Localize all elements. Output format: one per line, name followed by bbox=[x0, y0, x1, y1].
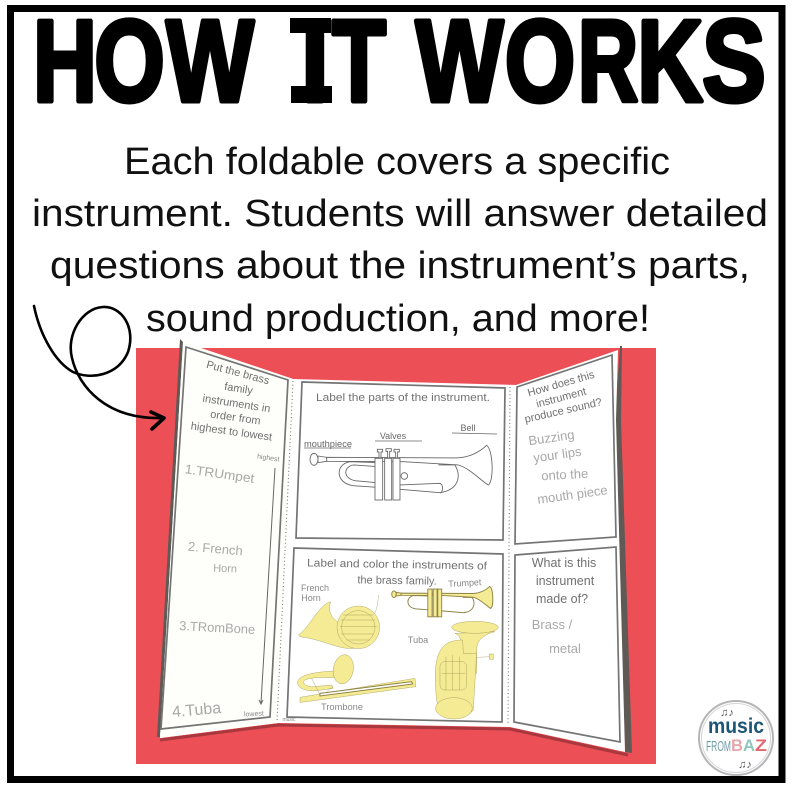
panel: order the instruments: 4.Tuba bbox=[171, 700, 222, 721]
title bbox=[33, 0, 766, 127]
logo: B bbox=[731, 736, 743, 755]
left flap tint bbox=[160, 342, 293, 738]
panel: what is it made of: metal bbox=[549, 641, 581, 656]
panel: order the instruments: Put the brass bbox=[205, 359, 271, 387]
title: R bbox=[578, 0, 638, 126]
panel: label the parts bbox=[296, 382, 505, 540]
logo bbox=[699, 701, 773, 775]
french horn bbox=[298, 595, 380, 649]
panel: what is it made of bbox=[514, 547, 620, 742]
title: O bbox=[505, 0, 575, 127]
arrow pointing to the foldable bbox=[34, 306, 164, 429]
logo: ♫♪ bbox=[738, 759, 752, 771]
panel: order the instruments: family bbox=[223, 381, 254, 397]
title: W bbox=[166, 0, 255, 126]
description text: instrument. Students will answer detailed bbox=[32, 193, 768, 235]
panel: how does it produce sound: How does this bbox=[526, 369, 597, 399]
title: T bbox=[332, 0, 386, 126]
pitch arrow bbox=[259, 468, 275, 704]
foldable paper bbox=[160, 342, 625, 752]
panel: what is it made of: What is this bbox=[532, 556, 596, 570]
logo: FROM bbox=[706, 738, 731, 755]
handwritten instrument labels bbox=[301, 577, 482, 712]
handwritten instrument labels: French bbox=[301, 583, 329, 593]
foldable bottom shadow bbox=[160, 725, 628, 755]
handwritten part labels bbox=[304, 423, 497, 449]
title: H bbox=[33, 0, 97, 126]
title: O bbox=[94, 0, 165, 127]
title: I bbox=[301, 0, 329, 126]
panel: order the instruments: 1.TRUmpet bbox=[184, 461, 256, 486]
panel: order the instruments bbox=[161, 347, 288, 729]
panel: what is it made of: made of? bbox=[536, 592, 588, 606]
logo: A bbox=[743, 736, 755, 755]
small credit mark: music bbox=[282, 717, 296, 723]
panel: label and color the brass family bbox=[287, 548, 503, 722]
panel: order the instruments: Horn bbox=[213, 563, 237, 575]
panel: how does it produce sound: mouth piece bbox=[536, 482, 608, 507]
fold perforations bbox=[277, 381, 510, 725]
colored trumpet bbox=[392, 586, 493, 617]
red photo background bbox=[136, 348, 656, 764]
panel: order the instruments: highest bbox=[257, 453, 280, 464]
title: W bbox=[416, 0, 504, 126]
panel: how does it produce sound: onto the bbox=[541, 466, 589, 483]
panel: what is it made of: instrument bbox=[536, 574, 595, 588]
handwritten instrument labels: Tuba bbox=[408, 635, 428, 645]
title: K bbox=[637, 0, 703, 127]
panel: order the instruments: highest to lowest bbox=[190, 420, 273, 444]
panel: label and color the brass family: Label and color the instruments of bbox=[307, 557, 488, 573]
handwritten part labels: mouthpiece bbox=[304, 439, 352, 449]
left and right dark edges bbox=[157, 339, 632, 753]
description text: questions about the instrument’s parts, bbox=[50, 245, 750, 287]
logo: Z bbox=[755, 736, 767, 755]
handwritten instrument labels: Trumpet bbox=[448, 577, 482, 589]
panel: order the instruments: instruments in bbox=[202, 393, 271, 415]
handwritten instrument labels: Trombone bbox=[321, 702, 363, 712]
panel: how does it produce sound bbox=[515, 355, 616, 544]
panel: label the parts: Label the parts of the instrument. bbox=[316, 392, 490, 404]
panel: how does it produce sound: instrument bbox=[535, 386, 588, 411]
handwritten part labels: Valves bbox=[380, 431, 407, 441]
panel: order the instruments: lowest bbox=[244, 710, 264, 719]
tuba bbox=[435, 621, 498, 719]
description text: sound production, and more! bbox=[146, 298, 650, 340]
panel: label and color the brass family: the brass family. bbox=[357, 574, 437, 588]
handwritten instrument labels: Horn bbox=[301, 593, 321, 603]
panel: how does it produce sound: Buzzing bbox=[527, 427, 575, 448]
panel: order the instruments: 2. French bbox=[187, 539, 243, 558]
description text bbox=[32, 141, 768, 340]
trombone bbox=[298, 653, 416, 702]
description text: Each foldable covers a specific bbox=[124, 141, 670, 183]
tri-fold foldable bbox=[157, 339, 632, 755]
panel: order the instruments: order from bbox=[209, 409, 261, 428]
logo: ♫♪ bbox=[720, 707, 734, 719]
handwritten part labels: Bell bbox=[460, 423, 476, 433]
panel: how does it produce sound: produce sound? bbox=[524, 396, 603, 426]
panel: order the instruments: 3.TRomBone bbox=[179, 618, 256, 637]
title: S bbox=[702, 0, 766, 126]
panel: what is it made of: Brass / bbox=[532, 617, 573, 632]
panel: how does it produce sound: your lips bbox=[532, 444, 583, 465]
logo: music bbox=[708, 715, 764, 738]
trumpet line drawing bbox=[310, 445, 492, 500]
